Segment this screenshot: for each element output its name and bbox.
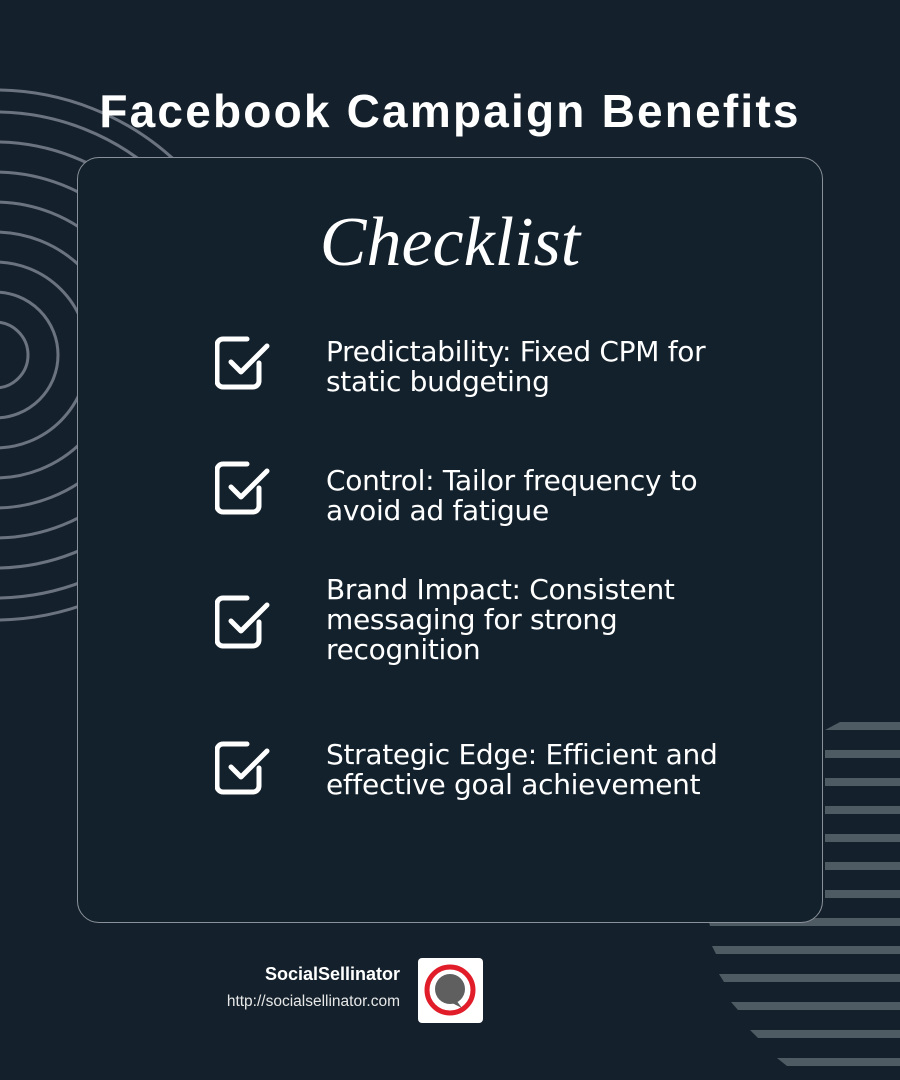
text xyxy=(326,738,717,801)
text xyxy=(326,335,706,398)
item 4 xyxy=(215,738,717,801)
text: Control: Tailor frequency to xyxy=(326,464,697,497)
text: Strategic Edge: Efficient and xyxy=(326,738,717,771)
text: Predictability: Fixed CPM for xyxy=(326,335,705,368)
title: Facebook Campaign Benefits xyxy=(99,85,801,137)
text: effective goal achievement xyxy=(326,768,700,801)
text: recognition xyxy=(326,633,480,666)
item 2 xyxy=(215,462,697,527)
footer brand: SocialSellinator xyxy=(265,964,400,984)
text xyxy=(326,464,697,527)
text xyxy=(326,573,675,666)
footer brand: http://socialsellinator.com xyxy=(227,993,400,1010)
icon: checkbox xyxy=(215,462,270,514)
text: messaging for strong xyxy=(326,603,617,636)
text: static budgeting xyxy=(326,365,550,398)
heading: Checklist: Checklist xyxy=(320,204,580,281)
footer brand xyxy=(227,964,400,1010)
item 3 xyxy=(215,573,675,666)
icon: checkbox xyxy=(215,742,270,794)
item 1 xyxy=(215,335,706,398)
text: Brand Impact: Consistent xyxy=(326,573,675,606)
text: avoid ad fatigue xyxy=(326,494,549,527)
panel: checklist card xyxy=(77,157,823,923)
icon: checkbox xyxy=(215,336,270,390)
icon: checkbox xyxy=(215,596,270,648)
icon: logo xyxy=(418,958,483,1023)
